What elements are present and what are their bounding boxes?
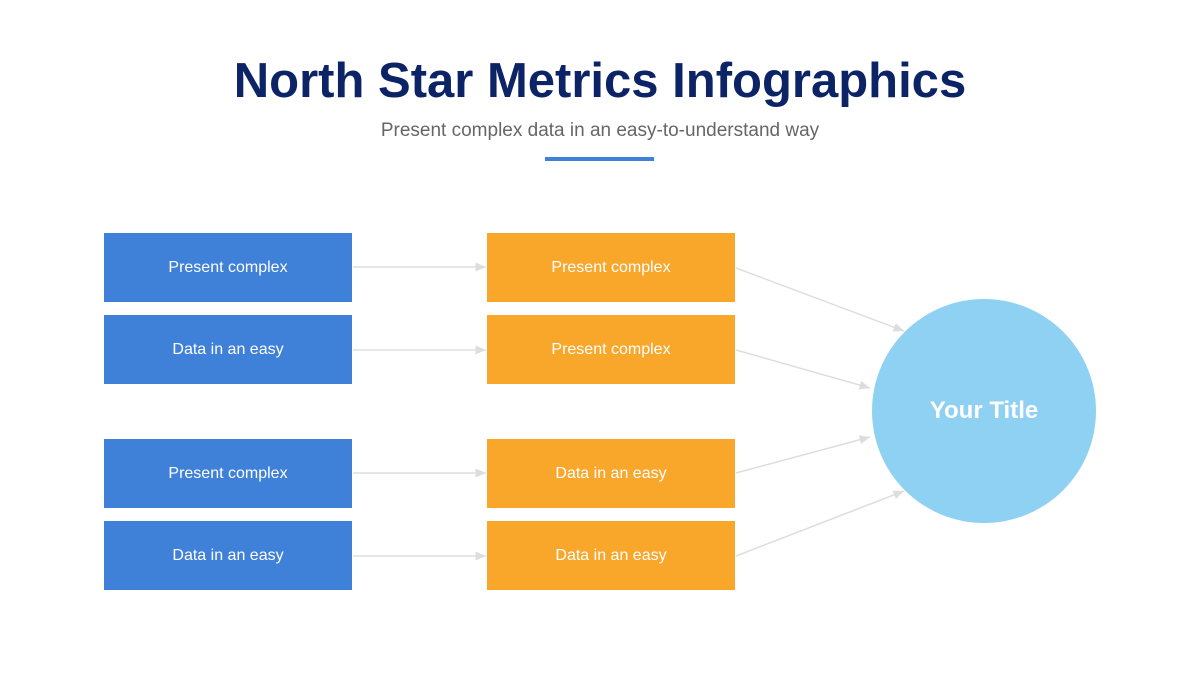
box: orange 4: Data in an easy xyxy=(555,546,667,564)
box: orange 1 xyxy=(487,233,735,302)
box: orange 3: Data in an easy xyxy=(555,464,667,482)
box: blue 3 xyxy=(104,439,352,508)
title: North Star Metrics Infographics xyxy=(234,54,966,108)
circle: your title xyxy=(872,299,1096,523)
underline accent xyxy=(545,157,654,161)
box: blue 1: Present complex xyxy=(168,258,288,276)
box: orange 2 xyxy=(487,315,735,384)
box: orange 1: Present complex xyxy=(551,258,671,276)
subtitle: Present complex data in an easy-to-understand way xyxy=(381,120,819,141)
box: blue 4 xyxy=(104,521,352,590)
box: orange 4 xyxy=(487,521,735,590)
box: blue 1 xyxy=(104,233,352,302)
box: orange 3 xyxy=(487,439,735,508)
circle: your title: Your Title xyxy=(930,397,1038,424)
box: blue 2: Data in an easy xyxy=(172,340,284,358)
box: blue 3: Present complex xyxy=(168,464,288,482)
box: blue 4: Data in an easy xyxy=(172,546,284,564)
box: orange 2: Present complex xyxy=(551,340,671,358)
box: blue 2 xyxy=(104,315,352,384)
